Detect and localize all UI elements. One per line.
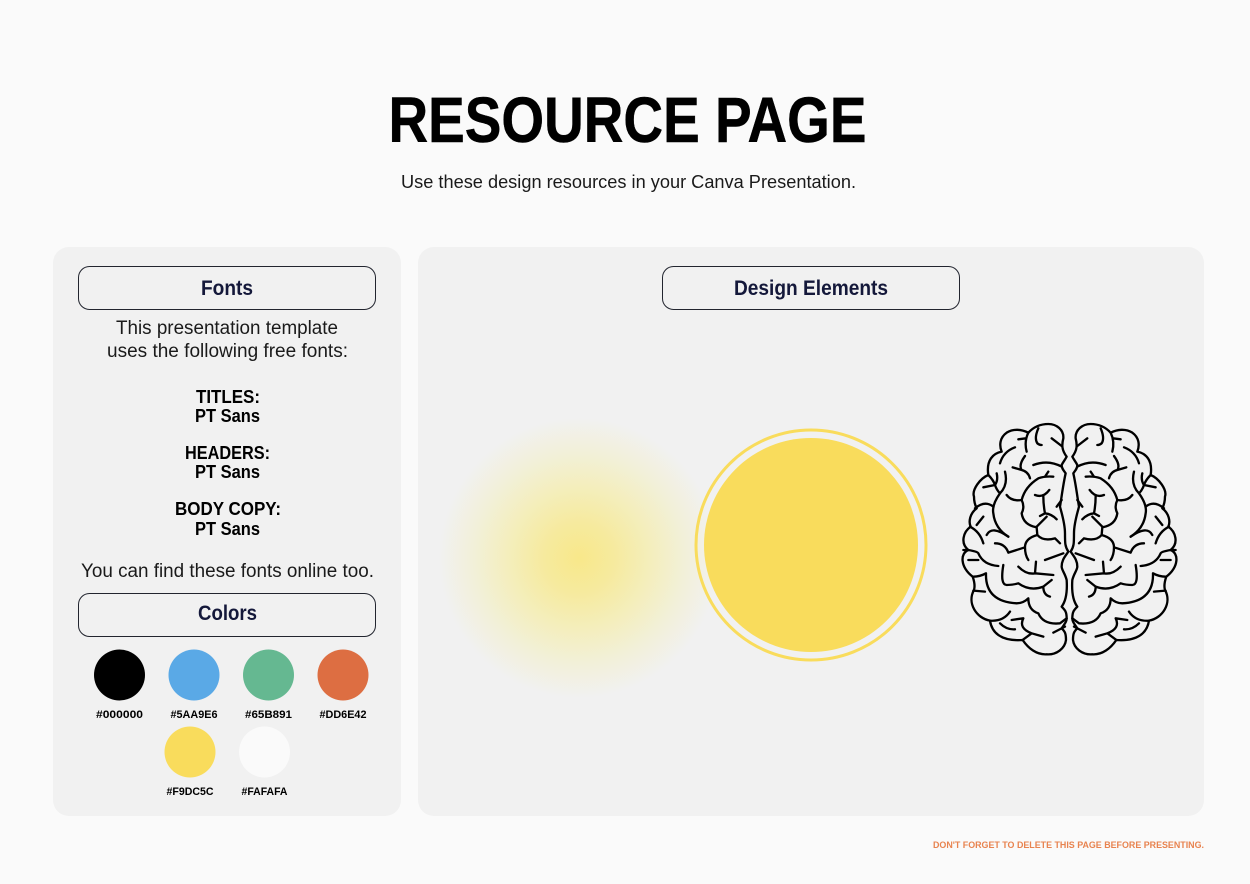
swatch: black: #000000 [96, 709, 143, 721]
subtitle: Use these design resources in your Canva Presentation. [401, 172, 856, 192]
heading: colors: Colors [198, 602, 257, 625]
heading: colors [78, 594, 376, 636]
text: body copy font: BODY COPY: [175, 498, 281, 519]
text: fonts intro: This presentation template [116, 318, 338, 339]
swatch: blue: #5AA9E6 [170, 709, 218, 721]
swatch: green: #65B891 [245, 709, 292, 721]
swatch: off-white: #FAFAFA [242, 786, 288, 798]
panel: fonts and colors [53, 247, 401, 816]
heading: fonts: Fonts [201, 277, 253, 300]
text: body copy font [175, 498, 281, 539]
heading: fonts [78, 266, 376, 310]
icon: brain [963, 424, 1176, 654]
element: soft yellow glow [439, 418, 719, 698]
element: yellow ringed circle [696, 430, 926, 660]
swatch: orange: #DD6E42 [320, 709, 366, 721]
heading: design elements: Design Elements [734, 277, 888, 300]
swatch: off-white [239, 726, 290, 798]
text: fonts note: You can find these fonts online too. [81, 561, 374, 582]
footer note: DON'T FORGET TO DELETE THIS PAGE BEFORE PRESENTING. [933, 840, 1204, 851]
text: titles font: TITLES: [196, 386, 260, 407]
text: fonts intro: uses the following free fonts: [107, 341, 348, 362]
text: headers font [185, 442, 270, 482]
panel: design elements [418, 247, 1204, 816]
text: titles font: PT Sans [195, 405, 260, 426]
text: fonts intro [107, 318, 348, 362]
swatch: orange [318, 650, 368, 721]
swatch: blue [168, 650, 220, 721]
text: headers font: PT Sans [195, 461, 260, 482]
text: body copy font: PT Sans [195, 518, 260, 539]
text: headers font: HEADERS: [185, 442, 270, 463]
swatch: yellow: #F9DC5C [166, 786, 214, 798]
swatch: yellow [164, 726, 216, 798]
title: RESOURCE PAGE [388, 84, 866, 156]
heading: design elements [662, 266, 960, 310]
swatch: green [243, 650, 294, 721]
text: titles font [195, 386, 260, 426]
swatch: black [94, 650, 145, 721]
